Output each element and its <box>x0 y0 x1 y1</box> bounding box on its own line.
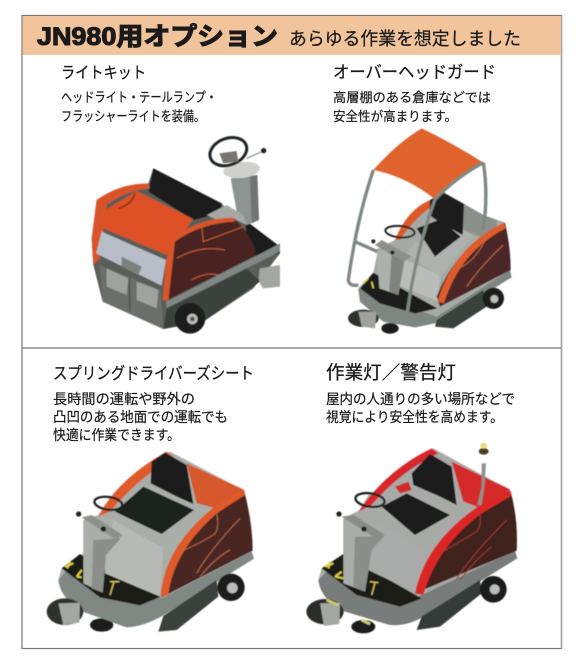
text: spring seat description <box>53 391 228 443</box>
text: work light description <box>326 391 515 425</box>
text: overhead guard description: 高層棚のある倉庫などでは <box>333 90 491 105</box>
title: JN980用オプション <box>37 23 278 51</box>
text: light kit description: フラッシャーライトを装備。 <box>61 109 205 124</box>
text: spring seat description: 凸凹のある地面での運転でも <box>53 409 228 425</box>
text: spring seat description: 快適に作業できます。 <box>53 427 180 443</box>
heading: work light and warning light: 作業灯／警告灯 <box>326 362 456 383</box>
text: work light description: 屋内の人通りの多い場所などで <box>326 391 515 407</box>
subtitle: あらゆる作業を想定しました <box>289 29 521 49</box>
heading: spring driver seat: スプリングドライバーズシート <box>53 364 254 383</box>
text: light kit description <box>61 90 217 124</box>
heading: light kit: ライトキット <box>61 65 146 82</box>
text: work light description: 視覚により安全性を高めます。 <box>326 409 503 425</box>
header band <box>22 16 561 55</box>
text: light kit description: ヘッドライト・テールランプ・ <box>61 90 217 105</box>
heading: overhead guard: オーバーヘッドガード <box>333 63 496 82</box>
machine: work light and warning light <box>306 443 517 633</box>
machine: spring driver seat <box>47 452 254 632</box>
machine: light kit rear view <box>92 133 280 334</box>
text: overhead guard description <box>333 90 491 124</box>
text: overhead guard description: 安全性が高まります。 <box>333 109 457 124</box>
machine: overhead guard <box>348 128 512 334</box>
text: spring seat description: 長時間の運転や野外の <box>53 391 195 407</box>
